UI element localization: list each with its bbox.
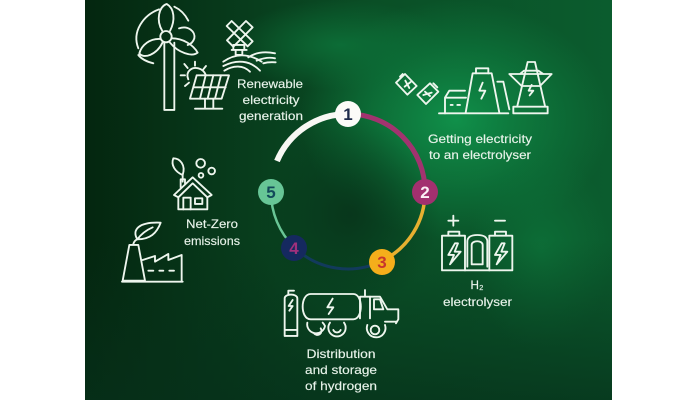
arc: step 1 white (277, 114, 348, 161)
text: net-zero emissions: Net-Zero (186, 217, 238, 231)
arc: step 3 yellow (382, 191, 425, 261)
node 5 (258, 179, 284, 205)
icon: wind turbine (136, 4, 198, 110)
text: H2 electrolyser: H₂ (470, 278, 484, 292)
arc: step 2 magenta (348, 114, 425, 191)
node 3 (369, 249, 395, 275)
text: H2 electrolyser: electrolyser (443, 295, 512, 309)
icon: solar panel with sun (181, 62, 229, 109)
icon: house with leaf and bubbles (173, 158, 215, 209)
text: distribution and storage of hydrogen: and storage (305, 363, 377, 377)
cycle diagram (258, 101, 438, 275)
node 1: 1 (343, 105, 353, 124)
icon: power plant and pylon (439, 62, 552, 113)
text: net-zero emissions (184, 217, 240, 248)
icon: hydrogen cylinder and tanker truck (285, 290, 398, 337)
node 2: 2 (420, 183, 430, 202)
node 5: 5 (266, 183, 276, 202)
background panel (85, 0, 612, 400)
text: net-zero emissions: emissions (184, 234, 240, 248)
node 1 (335, 101, 361, 127)
icon: windmill and hills (223, 21, 276, 72)
text: renewable electricity generation: Renewable (237, 77, 303, 91)
arc: step 5 green (271, 192, 294, 247)
text: distribution and storage of hydrogen (305, 347, 377, 393)
text: renewable electricity generation: generation (239, 109, 303, 123)
node 4 (281, 235, 307, 261)
icon: batteries (396, 74, 438, 104)
icon: factory with leaf (122, 223, 183, 282)
node 3: 3 (377, 253, 387, 272)
node 4: 4 (289, 239, 299, 258)
text: distribution and storage of hydrogen: of hydrogen (305, 379, 377, 393)
icon: electrolyser (442, 216, 512, 270)
text: H2 electrolyser (443, 278, 512, 309)
text: renewable electricity generation: electricity (242, 93, 300, 107)
text: getting electricity to an electrolyser: to an electrolyser (429, 148, 531, 162)
text: renewable electricity generation (237, 77, 303, 123)
text: getting electricity to an electrolyser (428, 132, 532, 162)
text: getting electricity to an electrolyser: Getting electricity (428, 132, 532, 146)
node 2 (412, 179, 438, 205)
arc: step 4 navy (294, 247, 382, 269)
text: distribution and storage of hydrogen: Distribution (306, 347, 376, 361)
